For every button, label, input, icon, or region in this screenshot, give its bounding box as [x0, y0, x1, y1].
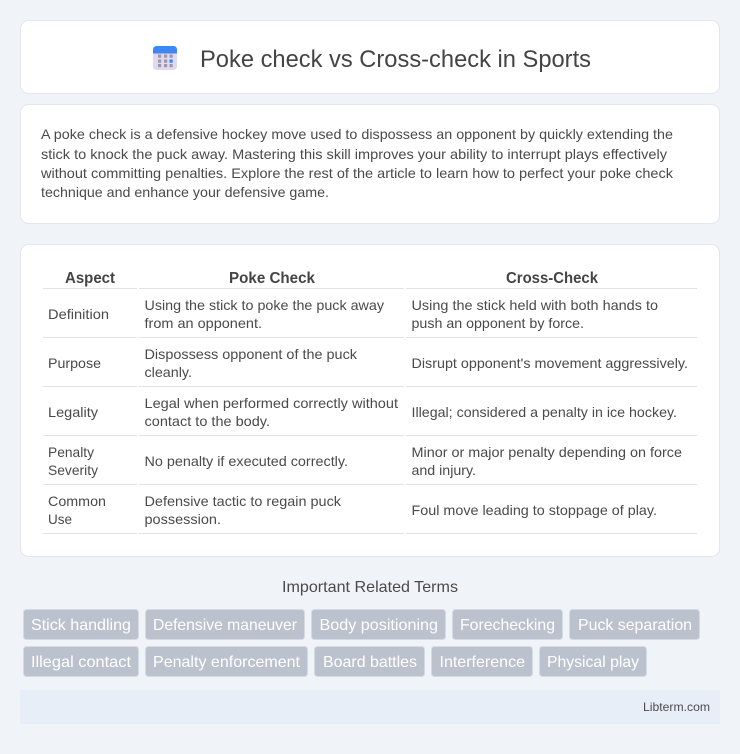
tags: related terms: Forechecking — [460, 617, 555, 634]
row: definition: Using the stick held with both hands to — [412, 297, 658, 313]
row: legality: Illegal; considered a penalty in ice hockey. — [412, 404, 677, 420]
row: definition: Definition — [48, 306, 109, 322]
row: definition — [48, 297, 658, 331]
panel: introduction — [20, 104, 720, 224]
tags: related terms: Board battles — [323, 654, 417, 671]
row: purpose: Disrupt opponent's movement aggressively. — [412, 355, 688, 371]
tags: related terms: Illegal contact — [31, 654, 132, 671]
row: penalty severity: and injury. — [412, 462, 476, 478]
tags: related terms: Defensive maneuver — [153, 617, 298, 634]
tags: related terms: Puck separation — [578, 617, 692, 634]
row: penalty severity: Severity — [48, 462, 98, 478]
intro text: A poke check is a defensive hockey move used to dispossess an opponent by quickly extending the — [41, 126, 673, 142]
row: legality — [48, 395, 677, 429]
intro text: technique and enhance your defensive game. — [41, 184, 329, 200]
table header row: Poke Check — [229, 270, 315, 287]
panel: title header — [20, 20, 720, 94]
tags: related terms: Body positioning — [320, 617, 438, 634]
row: penalty severity: Penalty — [48, 444, 94, 460]
row: common use: Defensive tactic to regain puck — [144, 493, 342, 509]
row: purpose: Purpose — [48, 355, 101, 371]
tags: related terms: Penalty enforcement — [153, 654, 301, 671]
table header row: Aspect — [65, 270, 116, 287]
tags: related terms: Stick handling — [31, 617, 131, 634]
row: legality: Legal when performed correctly without — [144, 395, 398, 411]
row: common use: possession. — [144, 511, 221, 527]
row: legality: contact to the body. — [144, 413, 270, 429]
title: Poke check vs Cross-check in Sports — [200, 46, 591, 73]
intro text: stick to knock the puck away. Mastering this skill improves your ability to interrupt plays effectively — [41, 146, 667, 162]
row: common use: Foul move leading to stoppage of play. — [412, 502, 657, 518]
row: common use — [48, 493, 657, 527]
table header row — [65, 270, 598, 287]
row: common use: Use — [48, 511, 72, 527]
table header row: Cross-Check — [506, 270, 598, 287]
row: definition: Using the stick to poke the puck away — [144, 297, 384, 313]
intro text — [40, 126, 674, 200]
row: purpose: Dispossess opponent of the puck — [144, 346, 358, 362]
row: purpose — [48, 346, 688, 380]
footer: Libterm.com — [643, 700, 710, 714]
tags: related terms: Interference — [440, 654, 525, 671]
row: definition: from an opponent. — [144, 315, 262, 331]
row: common use: Common — [48, 493, 106, 509]
icon: calendar — [153, 46, 177, 70]
footer — [20, 690, 720, 724]
row: penalty severity — [48, 444, 682, 478]
row: penalty severity: No penalty if executed correctly. — [144, 453, 348, 469]
row: legality: Legality — [48, 404, 98, 420]
heading: related terms: Important Related Terms — [282, 579, 458, 596]
row: penalty severity: Minor or major penalty depending on force — [412, 444, 682, 460]
tags: related terms: Physical play — [547, 654, 639, 671]
panel: comparison table — [20, 244, 720, 556]
row: purpose: cleanly. — [144, 364, 192, 380]
row: definition: push an opponent by force. — [412, 315, 584, 331]
tags: related terms — [24, 610, 700, 676]
intro text: without committing penalties. Explore the rest of the article to learn how to perfect your poke check — [40, 165, 674, 181]
